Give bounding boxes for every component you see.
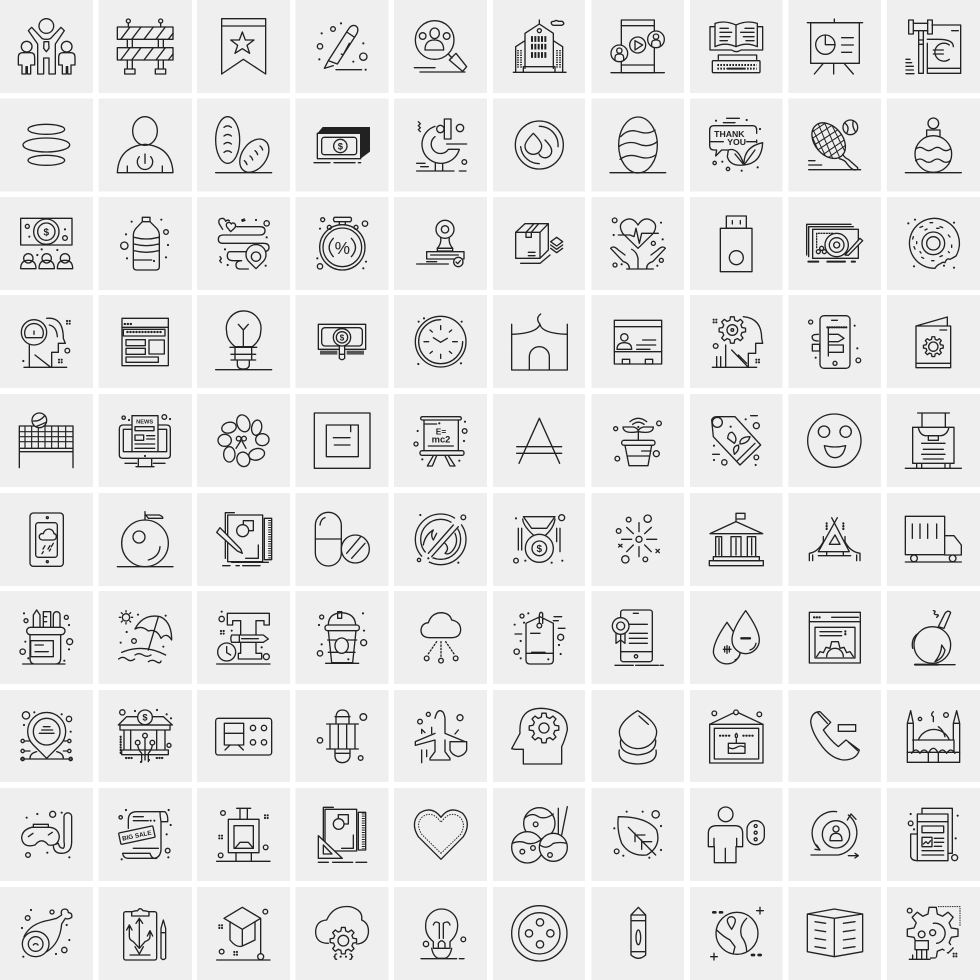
icon: birthday sign — [710, 710, 763, 763]
icon: phone minus — [811, 712, 859, 760]
icon: thank you bubble: YOU — [727, 137, 746, 147]
icon: person power button — [117, 117, 173, 173]
icon: leaf — [614, 811, 661, 858]
icon: lantern — [317, 710, 367, 763]
icon: pencil cup — [20, 610, 73, 664]
icon: vinyl cards and pencil — [807, 224, 863, 262]
icon: big sale scroll — [119, 810, 171, 859]
icon: presentation board — [807, 19, 863, 74]
icon: head with gear — [512, 708, 567, 764]
icon: sweet balls with sticks — [512, 807, 567, 863]
icon: tennis racket — [805, 116, 861, 170]
icon: stack of cash — [314, 127, 370, 163]
icon: dotted heart — [414, 810, 467, 859]
icon: drop on stack — [619, 711, 657, 764]
icon: arched gate — [512, 314, 567, 370]
icon: group of people — [18, 19, 75, 74]
icon block: rows 4-6, left columns — [19, 311, 467, 567]
icon: seeds ring — [218, 413, 269, 468]
icon: web layout — [122, 318, 168, 366]
icon: journey with hearts and pin — [218, 218, 269, 269]
icon block: rows 7-10, right columns — [512, 610, 960, 961]
icon: gear in head — [712, 317, 763, 367]
icon: cloud network — [421, 613, 461, 663]
icon: snorkel mask — [22, 811, 72, 857]
icon: design sheets and pencil — [217, 513, 272, 566]
icon: road barrier — [117, 19, 173, 74]
icon: percent stopwatch: % — [335, 238, 350, 258]
icon: phone video users — [611, 20, 664, 73]
icon: A currency — [517, 418, 562, 463]
icon: light bulb — [216, 311, 272, 370]
icon: bitten donut — [908, 218, 959, 268]
icon: smiley — [808, 414, 861, 467]
icon: globe with pin — [711, 907, 763, 960]
icon: big sale scroll: BIG SALE — [122, 830, 152, 843]
icon: light bulb filament — [421, 909, 466, 959]
icon: teepee — [809, 518, 860, 561]
icon: medicine pills — [315, 512, 369, 566]
icon: newspaper — [908, 808, 958, 861]
icon: stacked ellipses — [23, 124, 70, 165]
icon: blood drops plus minus — [713, 611, 759, 664]
icon: percent stopwatch — [317, 217, 368, 270]
icon: volleyball net — [19, 413, 73, 468]
icon: person with options — [708, 807, 764, 863]
icon block: rows 1-3, left columns — [18, 19, 467, 270]
icon: airplane with shield — [415, 711, 467, 763]
icon: E=mc2 board: E= — [436, 426, 446, 436]
icon: press machine — [217, 808, 270, 861]
icon: thank you bubble — [710, 118, 763, 171]
icon: beach umbrella — [119, 611, 172, 663]
icon: control panel card — [216, 718, 272, 755]
icon: luggage — [905, 413, 961, 468]
icon: typography T — [217, 612, 270, 664]
icon: crayon — [631, 907, 646, 958]
icon block: rows 7-10, left columns — [20, 610, 467, 960]
icon: news on monitor: NEWS — [136, 420, 153, 426]
icon: eco price tag — [712, 416, 761, 465]
icon: no fire — [415, 514, 466, 565]
icon: microscope — [417, 119, 467, 171]
icon: wall clock — [415, 316, 466, 367]
icon: cash and audience — [21, 218, 73, 269]
icon: drops in circle — [515, 121, 563, 169]
icon: browser settings — [809, 612, 860, 663]
icon: location pin circuit — [21, 712, 72, 761]
icon: marker pen — [317, 23, 367, 70]
icon: phone weather — [30, 513, 63, 566]
icon: framed note square — [314, 413, 370, 468]
icon: gear greeting card — [916, 317, 951, 368]
icon: stamp with check — [417, 220, 464, 267]
icon: mobile with flag — [809, 316, 861, 368]
icon: firework — [616, 515, 659, 563]
icon: heart in hands — [611, 218, 665, 269]
icon: dollar medal — [514, 515, 565, 563]
icon: open book on keyboard — [710, 22, 763, 73]
icon: bookmark star — [222, 19, 266, 74]
icon: delivery truck — [905, 516, 961, 562]
icon: bread loaves — [216, 117, 275, 178]
icon: cash under magnifier: $ — [340, 333, 345, 342]
icon: rotating user — [811, 811, 858, 858]
icon: cash and audience: $ — [44, 227, 50, 238]
icon: cash under magnifier — [318, 324, 366, 360]
icon: clipboard with arrows — [124, 909, 166, 960]
icon: design sheets with set square — [318, 807, 367, 862]
icon block: rows 4-6, right columns — [512, 314, 961, 566]
icon: price tag dashes — [514, 612, 565, 664]
icon: smart plant pot — [614, 418, 661, 466]
icon: open box book — [807, 909, 863, 957]
icon: easter egg — [610, 117, 666, 173]
icon: E=mc2 board: mc2 — [432, 434, 450, 444]
icon: E=mc2 board — [414, 417, 467, 466]
icon: gavel and euro document — [906, 20, 961, 74]
icon: building — [513, 20, 566, 72]
icon: thank you bubble: THANK — [714, 129, 745, 139]
icon: parcel box — [516, 224, 563, 263]
icon: digital bank: $ — [142, 713, 148, 723]
icon: mosque — [907, 711, 960, 762]
icon: water bottle — [121, 217, 168, 270]
icon: news on monitor — [119, 415, 170, 467]
icon: cloud with gear — [316, 906, 368, 959]
icon: bomb — [912, 611, 955, 665]
icon: digital bank — [118, 710, 172, 762]
icon: usb drive — [720, 216, 752, 272]
icon: takeaway cup — [317, 612, 367, 663]
icon: christmas ornament — [905, 118, 961, 173]
icon: clothing button — [512, 906, 567, 961]
icon: people search magnifier — [414, 21, 467, 72]
icon: gear with person — [907, 907, 960, 960]
icon: bank building — [709, 513, 763, 566]
icon: id card — [614, 320, 662, 364]
icon: orange fruit — [117, 512, 173, 567]
icon: ham leg — [22, 909, 72, 957]
icon block: rows 1-3, right columns — [513, 19, 961, 272]
icon: stack of cash: $ — [338, 141, 344, 151]
icon: head with gauge — [21, 318, 70, 367]
icon: graduation cap — [217, 907, 270, 960]
icon: phone certificate — [612, 610, 663, 665]
icon: dollar medal: $ — [537, 544, 543, 555]
